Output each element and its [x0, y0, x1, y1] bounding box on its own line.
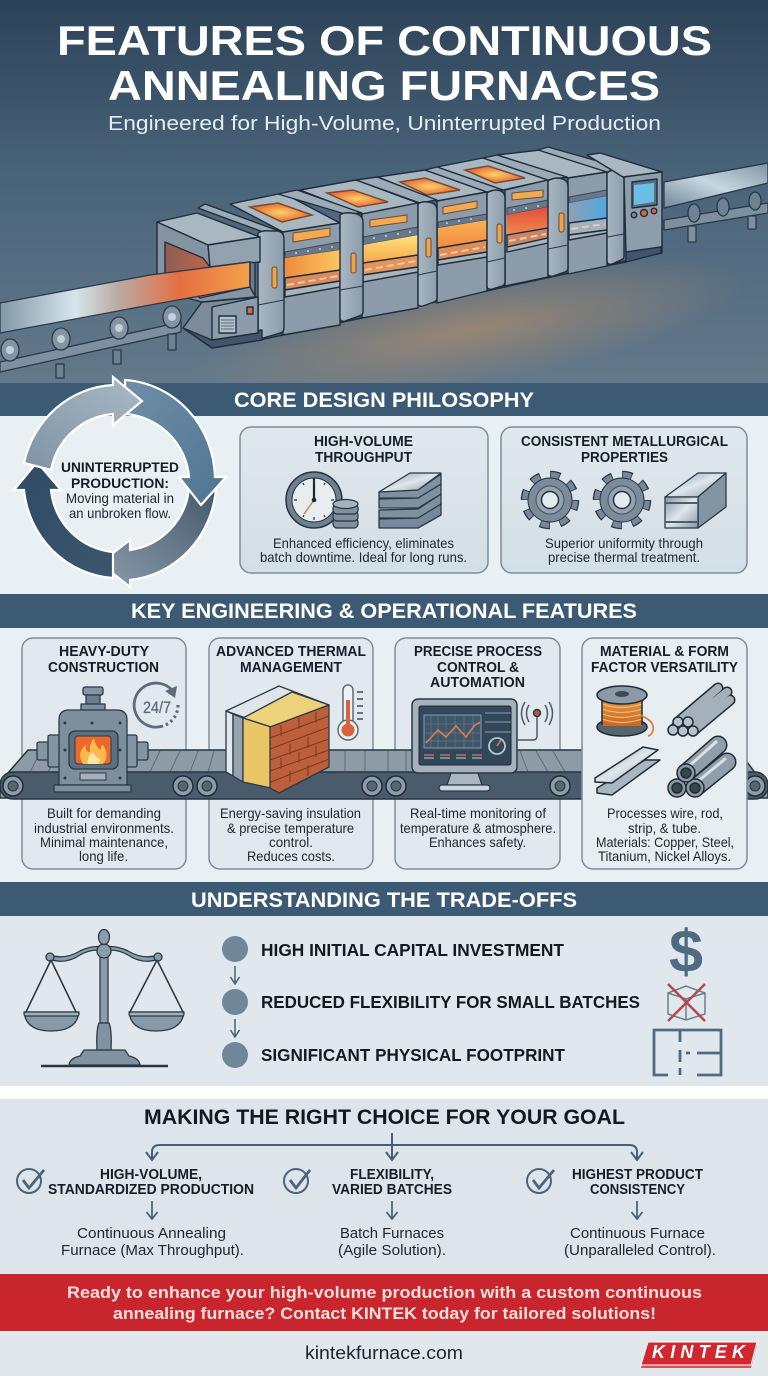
card: consistent metallurgical properties: CONSISTENT METALLURGICAL: [521, 434, 728, 450]
call to action banner: [0, 1274, 768, 1331]
card: consistent metallurgical properties: PROPERTIES: [581, 450, 668, 466]
option: flexibility: Batch Furnaces: [340, 1226, 444, 1242]
card: advanced thermal management: & precise temperature: [227, 820, 354, 836]
icon: balance scale: [24, 930, 184, 1066]
card: precise process control: PRECISE PROCESS: [414, 644, 542, 660]
footer: [0, 1331, 768, 1376]
icon: gear: [598, 476, 646, 524]
icon: sensor: [517, 702, 552, 740]
option: highest consistency: Continuous Furnace: [570, 1226, 705, 1242]
card: heavy-duty construction: HEAVY-DUTY: [59, 644, 149, 660]
title: [57, 17, 712, 109]
section heading bar: CORE DESIGN PHILOSOPHY: [234, 389, 534, 412]
list: trade-offs: SIGNIFICANT PHYSICAL FOOTPRINT: [261, 1045, 565, 1065]
title: ANNEALING FURNACES: [108, 62, 660, 109]
subtitle: Engineered for High-Volume, Uninterrupted Production: [108, 113, 661, 135]
section: key engineering features: [0, 594, 768, 882]
icon: floor plan: [654, 1030, 721, 1075]
card: high-volume throughput: HIGH-VOLUME: [314, 434, 413, 450]
flow label: PRODUCTION:: [71, 475, 169, 491]
flow label: UNINTERRUPTED: [61, 459, 179, 475]
option: flexibility: FLEXIBILITY,: [350, 1167, 434, 1183]
icon: dollar: $: [669, 918, 703, 985]
option: flexibility: (Agile Solution).: [338, 1243, 446, 1259]
option: highest consistency: [527, 1167, 716, 1259]
flow label: Moving material in: [66, 490, 174, 506]
card: advanced thermal management: control.: [269, 834, 313, 850]
section: making the right choice: [0, 1086, 768, 1274]
card: advanced thermal management: ADVANCED THERMAL: [216, 644, 366, 660]
icon: metal block: [665, 473, 726, 528]
slit lights: [293, 190, 543, 242]
icon: stacked sheets: [379, 473, 441, 528]
card: high-volume throughput: Enhanced efficiency, eliminates: [273, 535, 454, 551]
icon: 24/7 cycle: 24/7: [143, 699, 171, 717]
icon: check: [527, 1169, 554, 1193]
furnace sections: [198, 147, 624, 338]
left conveyor frame: [0, 306, 181, 378]
icon: gear: [526, 476, 574, 524]
card: advanced thermal management: Energy-saving insulation: [220, 805, 361, 821]
title: FEATURES OF CONTINUOUS: [57, 17, 712, 64]
front upper panels: [283, 172, 607, 335]
card: material and form factor versatility: strip, & tube.: [628, 820, 701, 836]
logo: KINTEK: [652, 1342, 747, 1362]
option: highest consistency: HIGHEST PRODUCT: [572, 1167, 703, 1183]
icon: monitor: [412, 699, 517, 791]
icon: 24/7 cycle: [134, 683, 178, 727]
lower rails: [285, 230, 607, 297]
icon: thermometer: [338, 685, 363, 740]
arrow: bottom right: [100, 488, 216, 587]
option: high-volume: Furnace (Max Throughput).: [61, 1243, 244, 1259]
icon: check: [17, 1169, 44, 1193]
card: consistent metallurgical properties: Superior uniformity through: [545, 535, 703, 551]
option: flexibility: VARIED BATCHES: [332, 1182, 452, 1198]
card: consistent metallurgical properties: precise thermal treatment.: [548, 549, 700, 565]
icon: wire spool: [597, 686, 653, 736]
card: material and form factor versatility: Titanium, Nickel Alloys.: [598, 848, 731, 864]
section heading bar: UNDERSTANDING THE TRADE-OFFS: [191, 889, 577, 912]
card: heavy-duty construction: long life.: [79, 848, 128, 864]
card: precise process control: Real-time monitoring of: [410, 805, 546, 821]
metal strip: [0, 262, 250, 333]
control panel: [587, 153, 662, 262]
card: consistent metallurgical properties: [501, 427, 747, 573]
card: high-volume throughput: batch downtime. Ideal for long runs.: [260, 549, 467, 565]
option: highest consistency: CONSISTENCY: [590, 1182, 685, 1198]
card: material and form factor versatility: MATERIAL & FORM: [600, 644, 729, 660]
furnace base: [260, 243, 662, 340]
icon: clock and coins: [286, 472, 358, 528]
website: kintekfurnace.com: [305, 1342, 463, 1363]
conveyor belt: [0, 750, 768, 799]
heated zones: [285, 250, 340, 278]
circular flow arrows: [14, 377, 226, 587]
rollers: [3, 776, 765, 796]
option: highest consistency: (Unparalleled Control).: [564, 1243, 716, 1259]
arrow: top right: [125, 380, 226, 505]
call to action banner: annealing furnace? Contact KINTEK today for tailored solutions!: [113, 1305, 656, 1323]
card: heavy-duty construction: CONSTRUCTION: [48, 660, 159, 676]
arrow: top left: [24, 377, 142, 470]
icon: rods: [668, 688, 730, 736]
list: trade-offs: [222, 936, 640, 1068]
section heading bar: [0, 383, 768, 416]
vertical bands: [198, 147, 622, 232]
icon: metal strips: [595, 747, 660, 795]
icon: furnace: [37, 687, 148, 792]
roller beds: [285, 218, 607, 290]
heading: MAKING THE RIGHT CHOICE FOR YOUR GOAL: [144, 1106, 625, 1129]
section: core design philosophy: [0, 383, 768, 594]
card: advanced thermal management: Reduces costs.: [247, 848, 335, 864]
entrance box: [157, 213, 262, 348]
card: heavy-duty construction: industrial environments.: [34, 820, 174, 836]
card: material and form factor versatility: [582, 638, 747, 869]
card: precise process control: CONTROL &: [437, 660, 519, 676]
section: understanding the trade-offs: [0, 882, 768, 1086]
option: high-volume: [17, 1167, 254, 1259]
option: high-volume: STANDARDIZED PRODUCTION: [48, 1182, 254, 1198]
card: high-volume throughput: [240, 427, 488, 573]
list: trade-offs: HIGH INITIAL CAPITAL INVESTMENT: [261, 940, 564, 960]
card: heavy-duty construction: [22, 638, 186, 869]
card: heavy-duty construction: Built for demanding: [47, 805, 161, 821]
logo: [641, 1342, 757, 1368]
card: high-volume throughput: THROUGHPUT: [315, 450, 412, 466]
rivet strips: [285, 190, 607, 258]
card: precise process control: [395, 638, 560, 869]
arrow: bottom left: [14, 462, 113, 578]
section heading bar: [0, 882, 768, 916]
card: precise process control: Enhances safety.: [429, 834, 526, 850]
section heading bar: KEY ENGINEERING & OPERATIONAL FEATURES: [131, 600, 637, 623]
option: flexibility: [284, 1167, 452, 1259]
hero background: [0, 0, 768, 433]
icon: check: [284, 1169, 310, 1193]
card: advanced thermal management: MANAGEMENT: [240, 660, 342, 676]
arrow tree: [146, 1133, 643, 1160]
flow label: [61, 459, 179, 521]
top faces: [230, 150, 607, 232]
card: advanced thermal management: [209, 638, 373, 869]
card: material and form factor versatility: Materials: Copper, Steel,: [596, 834, 734, 850]
call to action banner: Ready to enhance your high-volume production with a custom continuous: [67, 1284, 702, 1302]
card: material and form factor versatility: FACTOR VERSATILITY: [591, 660, 738, 676]
option: high-volume: HIGH-VOLUME,: [100, 1167, 202, 1183]
option: high-volume: Continuous Annealing: [77, 1226, 226, 1242]
card: precise process control: AUTOMATION: [430, 675, 525, 691]
illustration: continuous annealing furnace: [0, 147, 768, 378]
top windows: [250, 166, 525, 222]
list: trade-offs: REDUCED FLEXIBILITY FOR SMALL BATCHES: [261, 992, 640, 1012]
card: material and form factor versatility: Processes wire, rod,: [607, 805, 723, 821]
card: heavy-duty construction: Minimal maintenance,: [40, 834, 168, 850]
icon: crossed box: [668, 984, 705, 1021]
section heading bar: [0, 594, 768, 628]
right conveyor: [664, 163, 768, 242]
card: precise process control: temperature & atmosphere.: [400, 820, 556, 836]
icon: insulation wall: [226, 686, 329, 793]
icon: tubes: [668, 742, 727, 797]
flow label: an unbroken flow.: [69, 505, 171, 521]
